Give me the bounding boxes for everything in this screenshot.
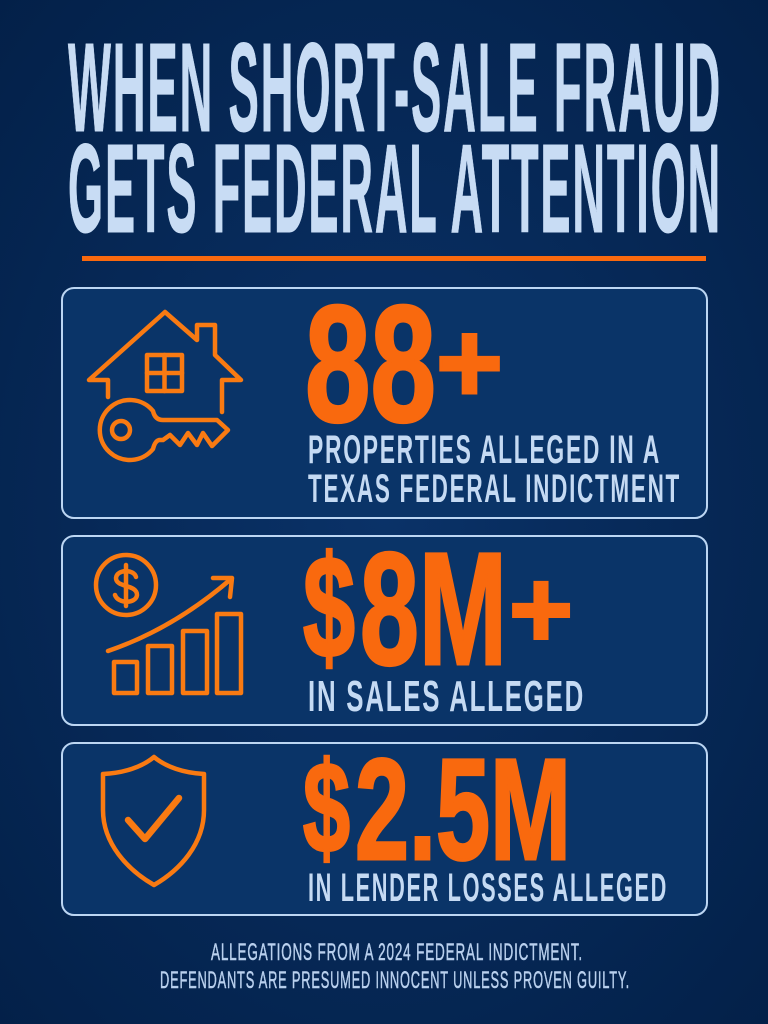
label: sales: IN SALES ALLEGED xyxy=(308,672,585,721)
icon: dollar and growth chart xyxy=(96,555,241,693)
stat: $8M+: 8M xyxy=(360,519,507,698)
label: properties xyxy=(308,428,681,511)
stat: $8M+: $ xyxy=(303,526,355,688)
stat: $2.5M: 2.5M xyxy=(355,729,571,890)
panel: sales xyxy=(62,519,707,725)
stat: 88+: + xyxy=(436,299,503,427)
stat: $8M+: + xyxy=(509,548,573,671)
icon: shield with check xyxy=(103,757,204,885)
title xyxy=(68,17,722,259)
footnote xyxy=(160,939,630,994)
panel: properties xyxy=(62,272,707,518)
panel: losses xyxy=(62,729,707,915)
stat: 88+: 88 xyxy=(305,272,436,457)
title underline xyxy=(82,256,706,261)
icon: house and key xyxy=(89,312,241,460)
stat: $2.5M xyxy=(303,729,571,890)
stat: $2.5M: $ xyxy=(303,736,350,880)
